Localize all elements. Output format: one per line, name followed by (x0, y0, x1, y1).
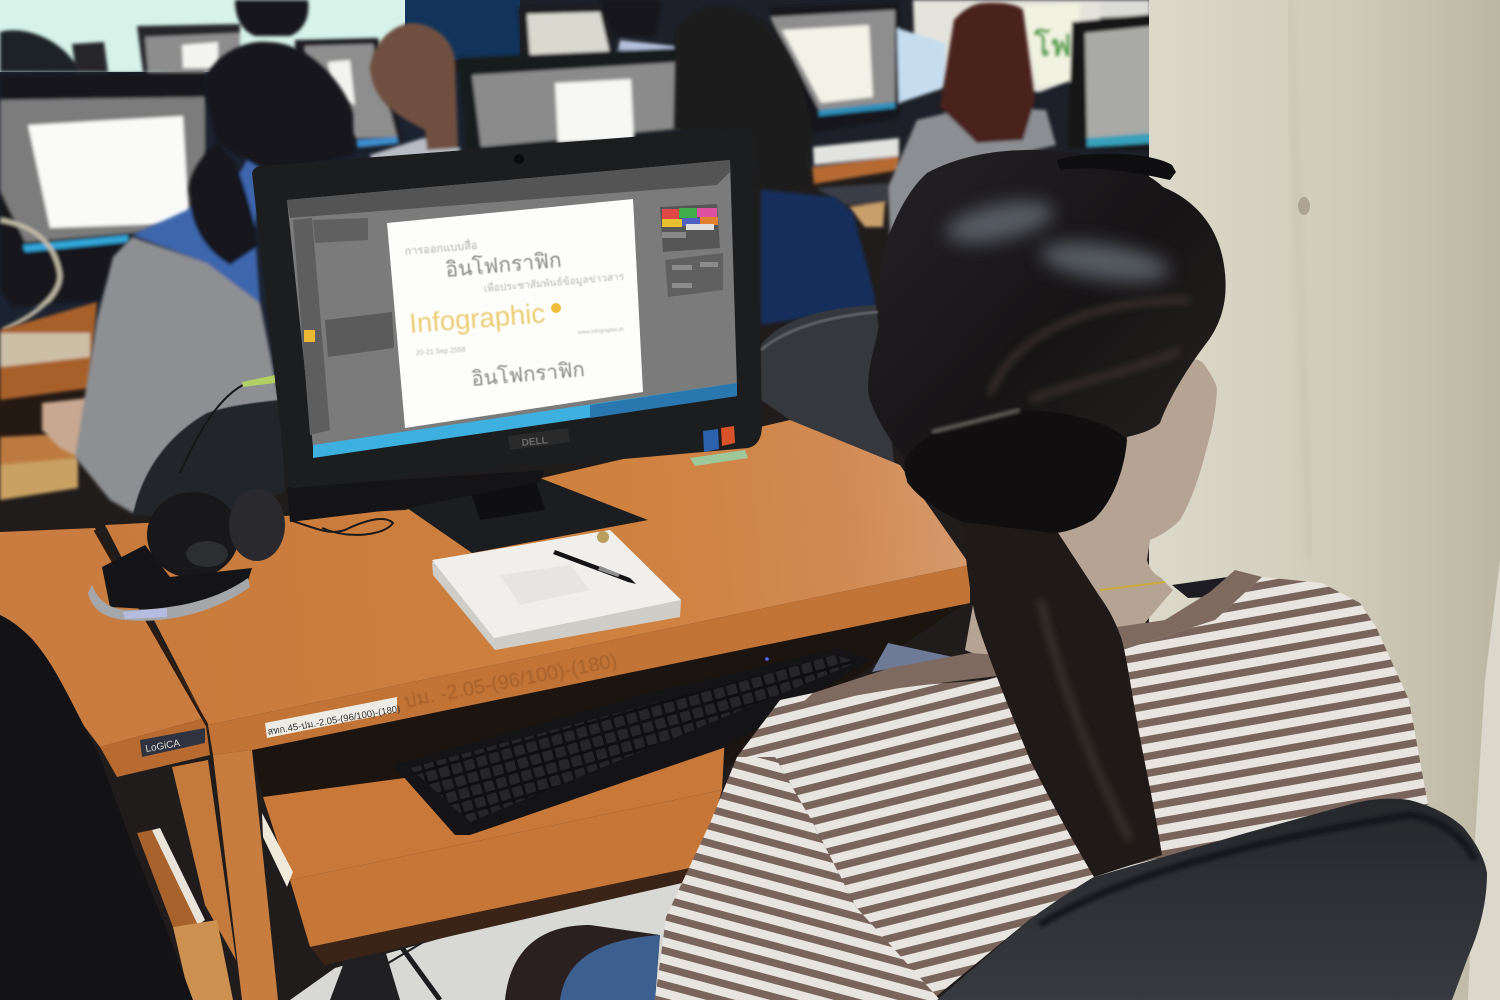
twist highlight (932, 410, 1020, 432)
artboard text: subtitle: เพื่อประชาสัมพันธ์ข้อมูลข่าวสาร (483, 269, 625, 295)
chair behind left girl (133, 400, 285, 520)
notebook (432, 530, 681, 650)
headphones (88, 375, 393, 621)
blue scarf (132, 150, 262, 303)
monitor: rear row centre-left (295, 38, 405, 150)
hair twist bun (905, 410, 1127, 533)
woman: striped shirt (650, 560, 1440, 1000)
tray runner (262, 813, 293, 887)
artboard (387, 199, 643, 428)
hair brown strands (990, 300, 1190, 400)
pen (553, 550, 636, 584)
far-left person head (0, 30, 80, 72)
artboard dot (551, 303, 561, 313)
rear desks (0, 138, 899, 500)
grey sweater (75, 237, 280, 513)
Logica badge: LoGiCA (145, 738, 181, 755)
coiled cable (290, 519, 393, 535)
monitor: right rear (770, 2, 900, 132)
intel sticker (703, 429, 719, 452)
background person: left with ponytail (42, 42, 354, 513)
blue shirt background person (897, 28, 947, 103)
woman's chair backrest (937, 799, 1487, 1000)
green tag under monitor (690, 450, 748, 466)
artboard text: heading small: การออกแบบสื่อ (404, 237, 478, 258)
hand on keyboard (42, 398, 88, 458)
rear head and blue shirt (600, 0, 675, 52)
hair clip (1057, 154, 1176, 180)
ponytail sheen (1040, 600, 1130, 840)
white cable (0, 220, 60, 330)
microphone foam (186, 541, 228, 567)
windows sticker (721, 426, 735, 446)
woman: collar left (800, 653, 1005, 705)
desk surface (105, 420, 970, 725)
earcup left (147, 492, 239, 578)
monitor: right edge (1068, 14, 1152, 150)
woman: necklace (1100, 582, 1165, 590)
background person: dark hair navy top (674, 7, 875, 325)
properties panel (665, 253, 723, 297)
main desk (0, 420, 970, 1000)
tools panel (313, 218, 368, 243)
sticker label: สทก.45-ปม.-2.05-(96/100)-(180) (267, 704, 401, 738)
desk front lip (208, 565, 970, 755)
bezel (252, 128, 762, 488)
audio cable to jack (180, 375, 275, 473)
foreground shoulder (0, 615, 193, 1000)
monitor: top centre (518, 4, 612, 56)
keyboard (393, 648, 870, 835)
background person: brown hair (370, 23, 460, 160)
headband strap (102, 545, 252, 610)
far white screens (913, 0, 1150, 92)
tool bar (293, 218, 330, 435)
far white screens: โฟ (1033, 27, 1071, 63)
background person: reddish hair (888, 3, 1056, 235)
artboard text: thai title: อินโฟกราฟิก (444, 248, 562, 282)
colour swatches panel (660, 204, 720, 252)
engraved text on desk edge: ปม. -2.05-(96/100)-(180) (402, 650, 619, 713)
desk legs (172, 750, 278, 1000)
monitor: rear row left (137, 24, 240, 72)
woman: neck, ear and skin (965, 359, 1217, 665)
left front desk (0, 528, 210, 777)
woman: collar (1110, 570, 1262, 650)
layer panel (325, 312, 394, 357)
chair behind monitor (761, 305, 895, 470)
earcup right (229, 489, 285, 561)
background monitors (0, 0, 1152, 330)
ponytail (963, 520, 1162, 877)
background wall (0, 0, 1160, 445)
back housing (287, 470, 545, 522)
shirt sleeve (655, 757, 939, 1000)
gap between desks (95, 530, 207, 725)
monitor: far left small (72, 42, 108, 72)
woman: legs and shorts (505, 925, 660, 1000)
main monitor (252, 128, 762, 522)
woman: hair (868, 150, 1226, 877)
monitor: centre rear (458, 48, 680, 152)
left rear desk (0, 302, 97, 400)
hair head (203, 42, 354, 168)
hair shine (942, 193, 1172, 289)
artboard text: Infographic: Infographic (408, 297, 546, 339)
webcam (514, 154, 524, 164)
artboard text: date: 20-21 Sep 2558 (416, 347, 466, 357)
dell logo: DELL (521, 435, 548, 449)
rear top head (235, 0, 308, 36)
ponytail (189, 143, 257, 265)
monitor stand (407, 478, 648, 553)
dell logo (508, 428, 570, 450)
under-desk shadow (252, 600, 970, 800)
Logica badge (140, 728, 205, 757)
left lower desk (0, 433, 78, 500)
keyboard tray (263, 735, 725, 965)
taskbar (313, 383, 737, 458)
artboard text: right credits: www.infographic.th (577, 327, 624, 336)
metal band (88, 578, 250, 621)
monitor: left foreground row (0, 72, 208, 307)
shirt back left (737, 676, 1156, 996)
hair mass (868, 150, 1226, 533)
artboard text: bottom thai title: อินโฟกราฟิก (470, 357, 586, 391)
woman: inner top pattern (872, 577, 1228, 672)
shirt back right (1124, 577, 1428, 859)
screen workspace (287, 160, 737, 447)
left pull-out shelf (137, 828, 233, 1000)
floor (290, 866, 700, 1000)
right wall (1149, 0, 1500, 1000)
